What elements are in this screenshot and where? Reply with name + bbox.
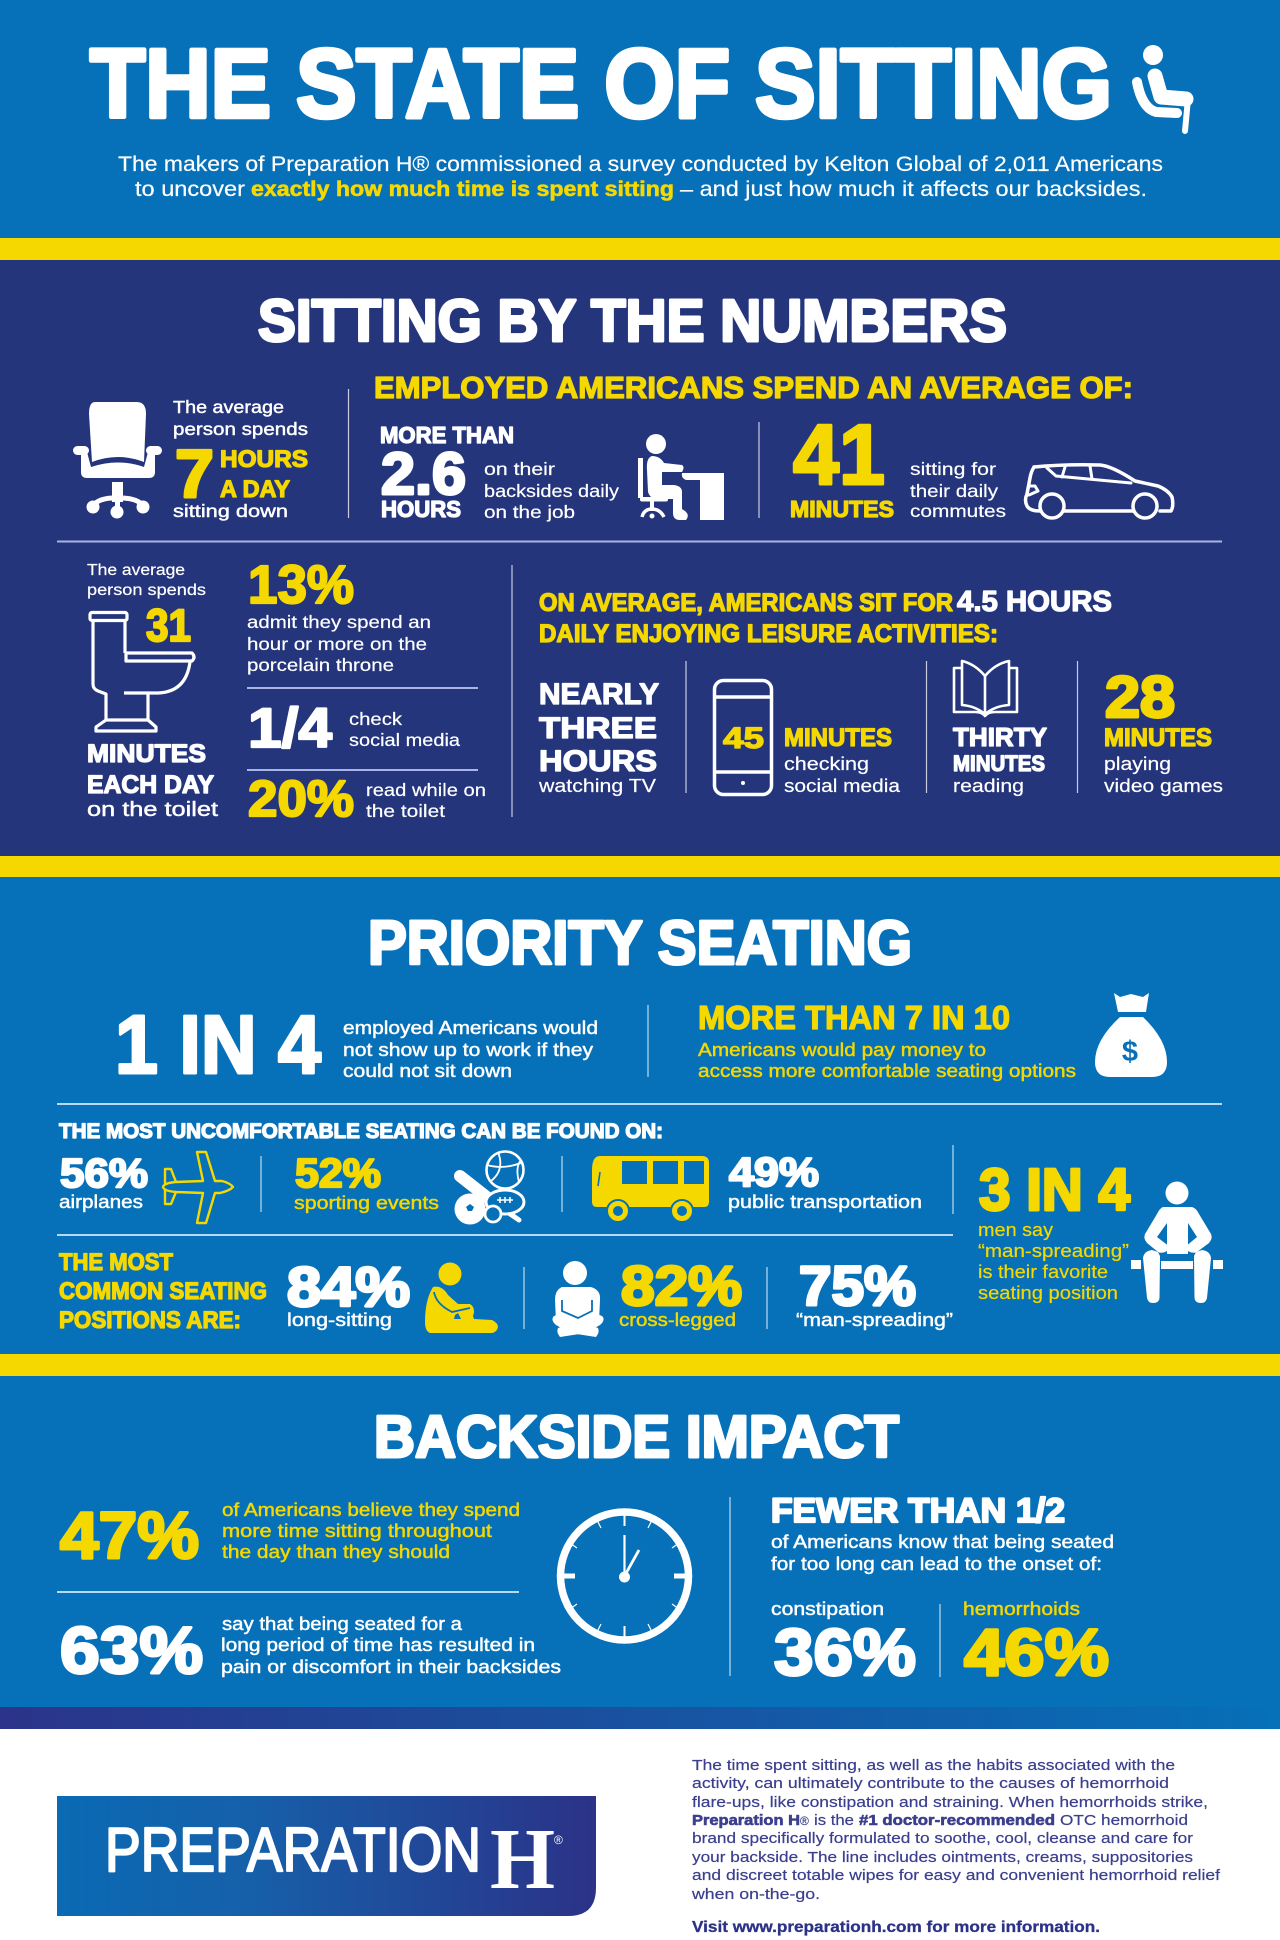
stat: 13%: 13% <box>248 555 354 615</box>
stat: 3 in 4: “man-spreading” <box>978 1241 1129 1261</box>
stat: 28 minutes: 28 <box>1105 665 1175 730</box>
stat: 28 minutes: playing <box>1104 754 1171 774</box>
stat: 63%: 63% <box>60 1613 203 1687</box>
stat: 20%: read while on <box>366 780 486 800</box>
stat: constipation 36%: 36% <box>774 1615 916 1689</box>
stat: nearly three hours: NEARLY <box>539 678 659 711</box>
stat: 45 minutes: checking <box>784 754 869 774</box>
stat: 7 hours a day <box>173 397 308 521</box>
stat: 41 minutes: their daily <box>910 481 998 501</box>
stat: 47%: the day than they should <box>222 1542 450 1562</box>
stat: cross-legged: 82% <box>621 1254 742 1317</box>
stat: 2.6 hours: on their <box>484 459 555 479</box>
heading: SITTING BY THE NUMBERS <box>258 288 1007 354</box>
icon: office chair <box>73 402 162 518</box>
subheading: leisure activities: DAILY ENJOYING LEISURE ACTIVITIES: <box>539 620 998 648</box>
stat: 1/4 <box>248 696 460 759</box>
logo: Preparation H: ® <box>554 1833 563 1847</box>
subheading: common seating positions <box>59 1249 267 1334</box>
intro text: to uncover <box>135 178 245 201</box>
stat: 7 hours a day: 7 <box>175 436 214 512</box>
stat: 41 minutes: 41 <box>793 408 885 503</box>
panel: backside impact <box>0 1376 1280 1707</box>
stat: 13%: admit they spend an <box>247 612 431 632</box>
text: brand description: ® <box>800 1814 809 1828</box>
stat: 1 in 4: not show up to work if they <box>343 1040 593 1060</box>
stat: 1/4: 1/4 <box>248 696 332 759</box>
icon: clock <box>560 1512 688 1640</box>
stat: 13%: porcelain throne <box>247 655 394 675</box>
stat: constipation 36%: constipation <box>771 1599 884 1619</box>
stat: public transportation: public transportation <box>728 1192 922 1212</box>
stat: minutes each day on the toilet: EACH DAY <box>87 771 214 799</box>
stat: 45 minutes: MINUTES <box>784 724 892 752</box>
text: brand description <box>691 1757 1221 1903</box>
text: brand description: brand specifically formulated to soothe, cool, cleanse and care for <box>692 1830 1193 1847</box>
stat: airplanes: airplanes <box>59 1192 143 1212</box>
stat: 47%: more time sitting throughout <box>222 1521 492 1541</box>
stat: nearly three hours: THREE <box>539 712 657 745</box>
subheading: common seating positions: THE MOST <box>59 1249 173 1276</box>
stat: 20% <box>248 770 486 827</box>
stat: public transportation: 49% <box>729 1149 819 1195</box>
text: brand description: #1 doctor-recommended <box>859 1812 1055 1829</box>
stat: man-spreading: “man-spreading” <box>796 1310 953 1330</box>
subheading: leisure activities <box>539 586 1112 648</box>
stat: thirty minutes: THIRTY <box>953 724 1047 752</box>
text: brand description: flare-ups, like constipation and straining. When hemorrhoids strike, <box>692 1794 1208 1811</box>
stat: 41 minutes: commutes <box>910 501 1006 521</box>
icon: money bag: $ <box>1122 1036 1138 1068</box>
stat: 3 in 4: seating position <box>978 1283 1118 1303</box>
subheading: uncomfortable seating: THE MOST UNCOMFORTABLE SEATING CAN BE FOUND ON: <box>59 1120 663 1143</box>
stat: 1/4: social media <box>349 730 460 750</box>
stat: 20%: the toilet <box>366 801 445 821</box>
icon: open book <box>954 661 1017 716</box>
stat: 45 minutes: social media <box>784 776 901 796</box>
stat: more than 7 in 10: MORE THAN 7 IN 10 <box>698 999 1010 1036</box>
intro text <box>118 153 1163 201</box>
stat: thirty minutes <box>953 724 1047 796</box>
stat: sporting events: 52% <box>295 1150 381 1196</box>
text: brand description: your backside. The line includes ointments, creams, suppositories <box>692 1849 1193 1866</box>
stat: 1 in 4: could not sit down <box>343 1061 512 1081</box>
stat: minutes each day on the toilet: on the toilet <box>87 799 219 821</box>
stat: 20%: 20% <box>248 770 354 827</box>
stat: 1 in 4: 1 IN 4 <box>115 998 321 1091</box>
stat: 28 minutes <box>1104 665 1223 796</box>
heading: PRIORITY SEATING <box>368 909 912 978</box>
icon: cross-legged person <box>552 1261 604 1337</box>
stat: 2.6 hours: backsides daily <box>484 481 619 501</box>
text: brand description: OTC hemorrhoid <box>1060 1812 1188 1829</box>
stat: 2.6 hours: HOURS <box>381 496 461 522</box>
text: brand description: when on-the-go. <box>691 1886 820 1903</box>
title: THE STATE OF SITTING <box>90 29 1112 138</box>
icon: car <box>1026 465 1173 518</box>
stat: 63%: long period of time has resulted in <box>221 1635 535 1655</box>
stat: fewer than 1/2: for too long can lead to the onset of: <box>771 1554 1102 1574</box>
stat: 47%: 47% <box>60 1498 199 1572</box>
stat: minutes each day on the toilet <box>87 562 219 821</box>
logo: Preparation H: H <box>490 1810 555 1907</box>
stat: 7 hours a day: person spends <box>173 419 308 439</box>
stat: 13%: hour or more on the <box>247 634 427 654</box>
stat: fewer than 1/2: of Americans know that being seated <box>771 1532 1114 1552</box>
stat: 63%: say that being seated for a <box>222 1614 463 1634</box>
stat: thirty minutes: MINUTES <box>953 751 1045 776</box>
logo: Preparation H <box>57 1796 596 1916</box>
stat: 3 in 4: men say <box>978 1220 1053 1240</box>
stat: 63%: pain or discomfort in their backsides <box>221 1657 561 1677</box>
stat: hemorrhoids 46%: hemorrhoids <box>963 1599 1080 1619</box>
logo: Preparation H: PREPARATION <box>105 1816 481 1885</box>
stat: more than 7 in 10: Americans would pay money to <box>698 1040 986 1060</box>
heading: BACKSIDE IMPACT <box>374 1404 899 1470</box>
text: brand description: Preparation H <box>692 1812 800 1829</box>
subheading: leisure activities: ON AVERAGE, AMERICANS SIT FOR <box>539 589 953 617</box>
stat: 45 minutes <box>723 722 901 796</box>
subheading: common seating positions: POSITIONS ARE: <box>59 1307 241 1334</box>
stat: long-sitting: long-sitting <box>287 1310 392 1330</box>
text: brand description: and discreet totable wipes for easy and convenient hemorrhoid relief <box>692 1867 1221 1884</box>
stat: 1/4: check <box>349 709 402 729</box>
icon: seated person <box>1137 45 1188 131</box>
subheading: employed Americans: EMPLOYED AMERICANS SPEND AN AVERAGE OF: <box>374 371 1133 405</box>
icon: airplane <box>163 1152 233 1223</box>
icon: bus <box>592 1156 709 1222</box>
stat: fewer than 1/2: FEWER THAN 1/2 <box>771 1492 1065 1530</box>
panel: footer <box>0 1729 1280 1940</box>
stat: fewer than 1/2 <box>771 1492 1114 1574</box>
stat: 3 in 4: 3 IN 4 <box>979 1157 1130 1223</box>
icon: man-spreading person <box>1131 1182 1223 1303</box>
icon: toilet with 31 <box>90 600 194 731</box>
stat: 41 minutes <box>790 408 1006 522</box>
intro text: exactly how much time is spent sitting <box>251 178 674 201</box>
stat: 47%: of Americans believe they spend <box>222 1500 520 1520</box>
text: brand description: is the <box>814 1812 854 1829</box>
stat: airplanes: 56% <box>60 1150 148 1196</box>
stat: 3 in 4 <box>978 1157 1130 1303</box>
stat: 45 minutes: 45 <box>723 722 764 755</box>
panel: priority seating <box>0 877 1280 1355</box>
stat: cross-legged: cross-legged <box>619 1310 736 1330</box>
stat: 47% <box>60 1498 520 1572</box>
subheading: common seating positions: COMMON SEATING <box>59 1278 267 1305</box>
stat: nearly three hours: HOURS <box>539 745 657 778</box>
stat: 7 hours a day: The average <box>173 397 284 417</box>
stat: nearly three hours <box>538 678 659 796</box>
text: brand description: activity, can ultimately contribute to the causes of hemorrhoid <box>692 1775 1169 1792</box>
stat: 7 hours a day: HOURS <box>220 446 308 473</box>
subheading: leisure activities: 4.5 HOURS <box>957 586 1112 618</box>
panel: sitting by the numbers <box>0 260 1280 856</box>
stat: airplanes <box>59 1150 148 1212</box>
stat: man-spreading: 75% <box>799 1254 916 1317</box>
intro text: The makers of Preparation H® commissioned a survey conducted by Kelton Global of 2,011 Americans <box>118 153 1163 176</box>
stat: minutes each day on the toilet: MINUTES <box>87 740 206 768</box>
text: brand description: The time spent sitting, as well as the habits associated with the <box>692 1757 1175 1774</box>
stat: more than 7 in 10: access more comfortable seating options <box>698 1061 1076 1081</box>
stat: thirty minutes: reading <box>953 776 1024 796</box>
icon: long-sitting person <box>425 1262 498 1333</box>
stat: 7 hours a day: A DAY <box>220 476 290 503</box>
stat: minutes each day on the toilet: The average <box>87 562 185 579</box>
text: website call to action: Visit www.preparationh.com for more information. <box>692 1919 1100 1936</box>
stat: 2.6 hours: MORE THAN <box>380 422 514 448</box>
stat: public transportation <box>728 1149 922 1212</box>
panel: header <box>0 0 1280 238</box>
stat: 28 minutes: video games <box>1104 776 1223 796</box>
stat: nearly three hours: watching TV <box>538 776 656 796</box>
stat: 41 minutes: sitting for <box>910 459 996 479</box>
icon: sports balls <box>454 1152 524 1224</box>
stat: long-sitting: 84% <box>287 1255 410 1318</box>
intro text: – and just how much it affects our backsides. <box>680 178 1147 201</box>
stat: sporting events: sporting events <box>294 1193 439 1213</box>
stat: 63% <box>60 1613 561 1687</box>
stat: 13% <box>247 555 431 675</box>
stat: 2.6 hours: 2.6 <box>381 441 466 507</box>
icon: toilet with 31: 31 <box>146 600 191 651</box>
stat: more than 7 in 10 <box>698 999 1076 1081</box>
stat: 2.6 hours <box>380 422 619 522</box>
stat: 1 in 4 <box>115 998 598 1091</box>
stat: man-spreading <box>796 1254 953 1330</box>
stat: 2.6 hours: on the job <box>484 502 575 522</box>
stat: sporting events <box>294 1150 439 1213</box>
icon: money bag <box>1095 993 1167 1077</box>
icon: phone <box>714 680 772 794</box>
stat: 3 in 4: is their favorite <box>978 1262 1108 1282</box>
stat: 28 minutes: MINUTES <box>1104 724 1212 752</box>
stat: minutes each day on the toilet: person spends <box>87 582 206 599</box>
icon: person at desk <box>638 434 724 520</box>
stat: 41 minutes: MINUTES <box>790 496 894 522</box>
stat: 1 in 4: employed Americans would <box>343 1018 598 1038</box>
stat: 7 hours a day: sitting down <box>173 501 288 521</box>
stat: hemorrhoids 46%: 46% <box>964 1615 1109 1689</box>
